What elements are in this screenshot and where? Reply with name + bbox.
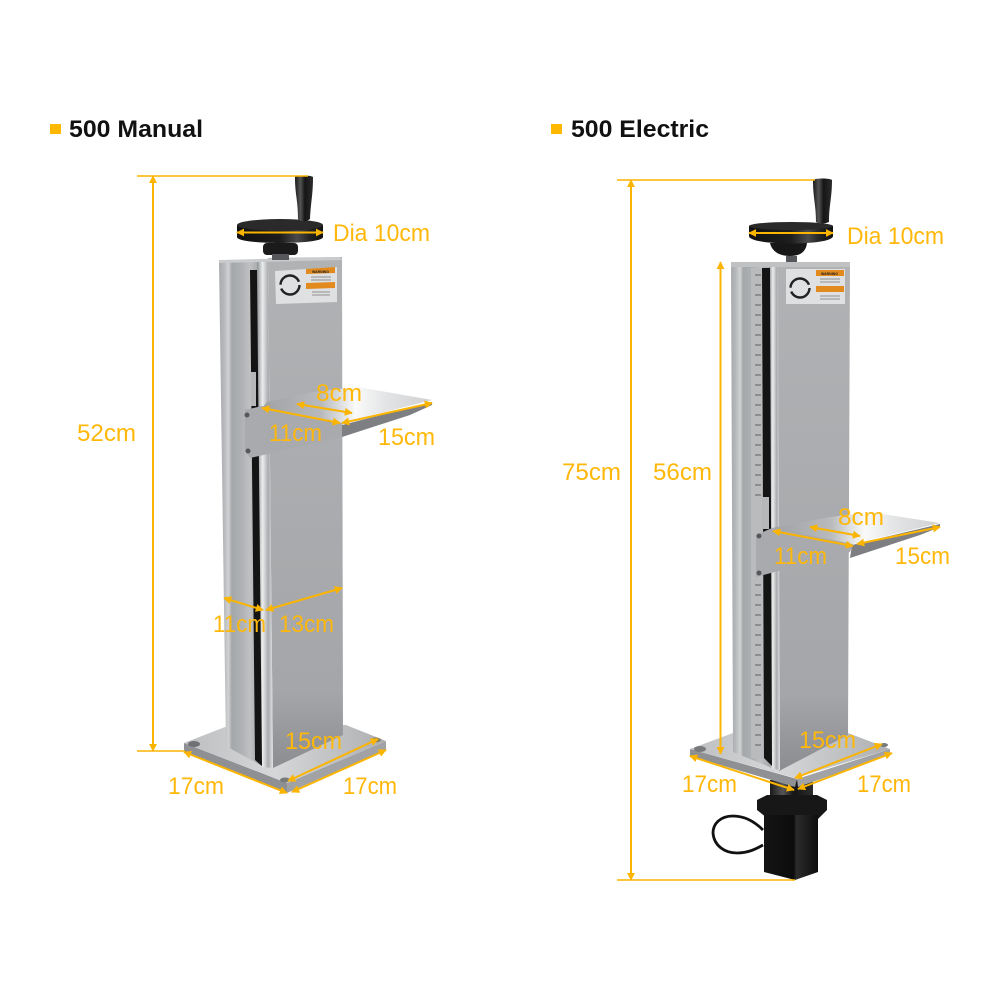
column body (731, 262, 850, 771)
dimension labels: 500 Manual: 15cm (378, 424, 435, 451)
handwheel (749, 178, 833, 262)
dimension labels: 500 Electric: 17cm (682, 771, 737, 798)
shelf bracket (244, 372, 432, 458)
product: 500 Electric column stand (690, 178, 940, 880)
warning label: WARNING (821, 272, 838, 276)
warning label (786, 269, 845, 304)
dimension labels: 500 Manual: 13cm (279, 611, 334, 638)
dimension labels: 500 Electric (562, 223, 950, 798)
warning label (275, 267, 337, 304)
dimension labels: 500 Electric: 15cm (895, 543, 950, 570)
dimension labels: 500 Manual: 17cm (168, 773, 224, 800)
dimension labels: 500 Electric: 15cm (799, 727, 856, 754)
handwheel (237, 176, 323, 260)
product: 500 Manual column stand (184, 176, 432, 793)
dimension labels: 500 Electric: 8cm (838, 504, 884, 531)
dimension labels: 500 Manual: 52cm (77, 420, 136, 447)
dimension labels: 500 Electric: Dia 10cm (847, 223, 944, 250)
dimension labels: 500 Manual: 11cm (213, 611, 266, 638)
dimension labels: 500 Manual: 11cm (269, 420, 322, 447)
dimension lines: 500 Manual (137, 176, 432, 793)
dimension labels: 500 Manual: 17cm (343, 773, 397, 800)
motor (713, 780, 827, 880)
dimension labels: 500 Electric: 75cm (562, 459, 621, 486)
dimension labels: 500 Electric: 11cm (774, 543, 827, 570)
column body (219, 257, 343, 768)
dimension labels: 500 Manual: 8cm (316, 380, 362, 407)
dimension labels: 500 Manual: 15cm (285, 728, 342, 755)
base plate (184, 725, 386, 793)
dimension labels: 500 Electric: 17cm (857, 771, 911, 798)
dimension lines: 500 Electric (617, 180, 940, 880)
dimension labels: 500 Manual (77, 220, 435, 800)
ruler scale (751, 268, 762, 758)
shelf bracket (756, 497, 940, 577)
heading: 500 Manual: 500 Manual (69, 116, 203, 143)
warning label: WARNING (312, 270, 329, 274)
dimension labels: 500 Electric: 56cm (653, 459, 712, 486)
heading: 500 Electric: 500 Electric (571, 116, 709, 143)
base plate (690, 733, 890, 787)
dimension labels: 500 Manual: Dia 10cm (333, 220, 430, 247)
